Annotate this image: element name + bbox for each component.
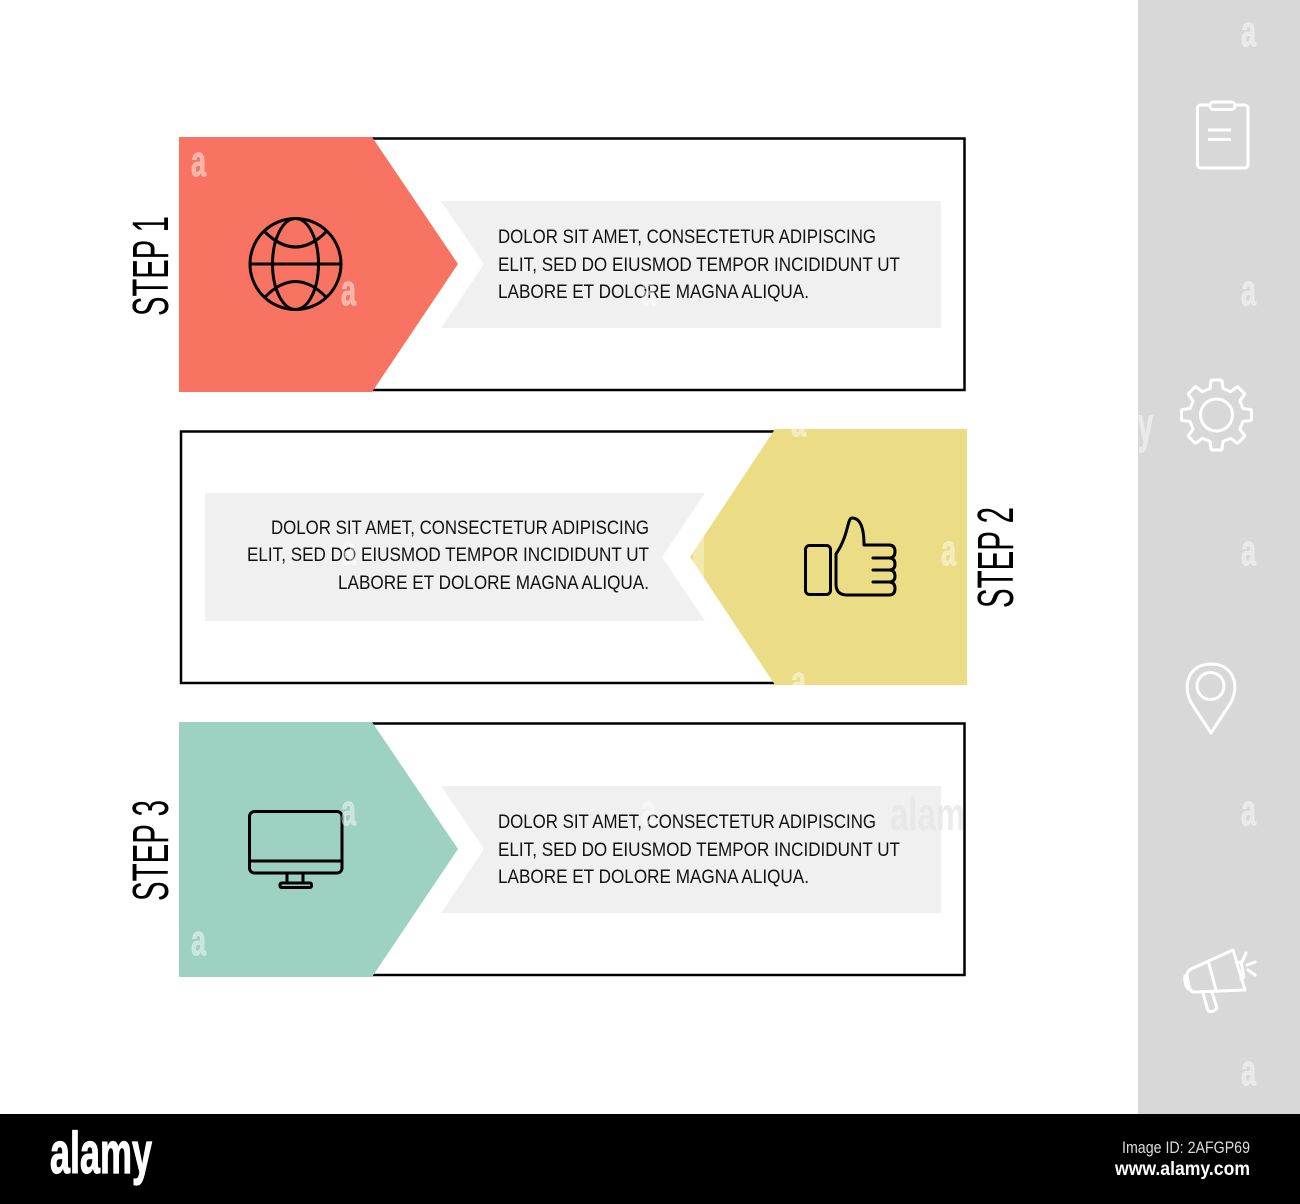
step 2 description [247, 518, 649, 594]
step 3 label: STEP 3 [122, 800, 179, 901]
step 1 description: DOLOR SIT AMET, CONSECTETUR ADIPISCING [498, 227, 876, 248]
step 2 text background chevron [205, 493, 705, 621]
step 3 description: ELIT, SED DO EIUSMOD TEMPOR INCIDIDUNT UT [498, 840, 900, 861]
step 2 description: ELIT, SED DO EIUSMOD TEMPOR INCIDIDUNT UT [247, 545, 649, 566]
icon: clipboard [1198, 102, 1248, 168]
step 1 description: LABORE ET DOLORE MAGNA ALIQUA. [498, 282, 809, 303]
watermark letters: a [1241, 7, 1256, 56]
image id: Image ID: 2AFGP69 [1122, 1138, 1250, 1157]
website: www.alamy.com [1114, 1159, 1250, 1180]
watermark letters: a [1241, 266, 1256, 315]
watermark letters: a [791, 397, 806, 446]
watermark letters [191, 7, 1256, 1095]
icon: map pin [1187, 664, 1235, 733]
panel: step 2 [181, 429, 1024, 685]
watermark letters: a [341, 786, 356, 835]
step 1 label: STEP 1 [122, 216, 179, 316]
step 1 outline [180, 138, 964, 390]
sidebar panel [1138, 0, 1300, 1114]
watermark letters: a [1241, 786, 1256, 835]
step 1 coral arrow [179, 137, 458, 392]
watermark letters: a [191, 137, 206, 186]
watermark letters: a [941, 526, 956, 575]
watermark letters: y [1138, 397, 1153, 453]
watermark letters: a [641, 266, 656, 315]
watermark letters: a [341, 266, 356, 315]
watermark letters: a [341, 526, 356, 575]
watermark letters: a [191, 916, 206, 965]
icon: thumbs up [806, 518, 895, 595]
step 3 outline [180, 724, 964, 975]
watermark letters: a [1241, 1046, 1256, 1095]
step 3 description [498, 812, 900, 888]
step 1 text background chevron [441, 201, 941, 328]
icon: globe [250, 218, 341, 310]
step 2 description: LABORE ET DOLORE MAGNA ALIQUA. [338, 573, 649, 594]
icon: megaphone [1185, 950, 1255, 1012]
footer band [0, 1114, 1300, 1204]
step 2 outline [181, 432, 965, 683]
watermark letters: a [791, 657, 806, 706]
step 2 arrow tip highlight [693, 536, 704, 578]
step 3 teal arrow [179, 722, 458, 977]
watermark letters: alam [890, 788, 965, 840]
panel: step 3 [122, 722, 964, 977]
step 3 text background chevron [441, 786, 941, 913]
step 1 description [498, 227, 900, 303]
step 2 yellow arrow [690, 429, 967, 685]
step 1 description: ELIT, SED DO EIUSMOD TEMPOR INCIDIDUNT UT [498, 255, 900, 276]
watermark letters: a [1241, 526, 1256, 575]
watermark letters: a [641, 786, 656, 835]
step 3 description: DOLOR SIT AMET, CONSECTETUR ADIPISCING [498, 812, 876, 833]
icon: gear [1182, 380, 1252, 450]
icon: monitor [250, 812, 342, 888]
step 2 description: DOLOR SIT AMET, CONSECTETUR ADIPISCING [271, 518, 649, 539]
step 2 label: STEP 2 [967, 507, 1024, 608]
alamy logo: alamy [50, 1121, 152, 1186]
step 3 description: LABORE ET DOLORE MAGNA ALIQUA. [498, 867, 809, 888]
panel: step 1 [122, 137, 964, 392]
